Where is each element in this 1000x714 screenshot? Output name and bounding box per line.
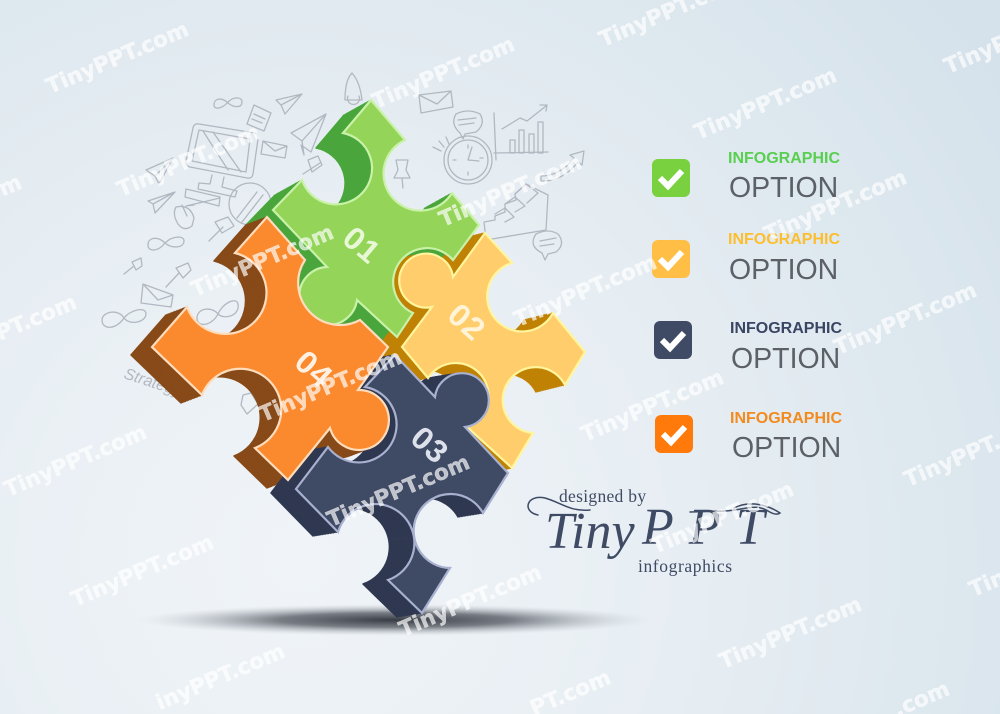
legend row 1 bbox=[652, 150, 840, 204]
text: strategy doodle: Strategy bbox=[122, 366, 185, 401]
watermarks: TinyPPT.com bbox=[369, 32, 519, 115]
icon: crossed circle bbox=[229, 183, 271, 225]
watermarks: TinyPPT.com bbox=[68, 530, 218, 613]
piece 02 top face bbox=[399, 233, 585, 468]
label: option: OPTION bbox=[729, 172, 838, 204]
watermarks: TinyPPT.com bbox=[188, 220, 338, 303]
icon: push pin left bbox=[303, 156, 322, 174]
piece 01 green side bbox=[246, 101, 478, 352]
icon: envelope top right bbox=[419, 91, 453, 113]
legend row 4 bbox=[655, 410, 842, 464]
icon: bar chart bbox=[494, 105, 548, 160]
icon: speech bubble bbox=[454, 111, 482, 139]
icon: pin mid bbox=[209, 217, 234, 241]
label: infographic yellow: INFOGRAPHIC bbox=[728, 231, 840, 248]
icon: paper plane left bbox=[146, 158, 173, 184]
label: infographic green: INFOGRAPHIC bbox=[728, 150, 840, 167]
puzzle piece 01 face bbox=[273, 100, 479, 337]
icon: note bbox=[247, 105, 271, 131]
icon: infinity over orange bbox=[197, 301, 238, 324]
watermarks: TinyPPT.com bbox=[691, 63, 841, 146]
icon: push pin bbox=[394, 160, 410, 188]
icon: mouse bbox=[174, 198, 220, 229]
icon: paper plane lower bbox=[148, 192, 175, 213]
legend bbox=[652, 150, 842, 464]
doodle icons cluster bbox=[102, 73, 584, 414]
piece 03 top face bbox=[296, 355, 508, 613]
text: PPT script: PPT bbox=[641, 499, 779, 556]
watermarks: TinyPPT.com bbox=[1, 420, 151, 503]
puzzle piece 04 face bbox=[152, 217, 389, 480]
watermarks: TinyPPT.com bbox=[831, 278, 981, 361]
icon: stairs bbox=[484, 184, 548, 240]
watermarks: inyPPT.com bbox=[152, 639, 289, 714]
watermarks: TinyPPT.com bbox=[716, 592, 866, 675]
icon: envelope bbox=[261, 141, 287, 158]
icon: speech bubble lower bbox=[533, 231, 562, 260]
icon: infinity left bbox=[148, 237, 184, 250]
text: Tiny script: Tiny bbox=[545, 503, 635, 560]
text: infographics: infographics bbox=[638, 556, 733, 576]
puzzle piece 02 face bbox=[399, 233, 585, 468]
number 02: 02 bbox=[441, 296, 493, 348]
label: option: OPTION bbox=[731, 343, 840, 375]
ground shadow bbox=[137, 604, 653, 636]
icon: curved arrow bbox=[541, 151, 584, 181]
piece 04 top face bbox=[152, 217, 389, 480]
icon: infinity lower left bbox=[102, 310, 146, 327]
watermarks: TinyPPT.com bbox=[256, 345, 406, 428]
watermarks: TinyPPT.com bbox=[114, 120, 264, 203]
icon: large paper plane bbox=[291, 114, 326, 155]
label: option: OPTION bbox=[732, 432, 841, 464]
icon: pin long bbox=[166, 263, 191, 287]
icon: small pin bbox=[124, 258, 142, 274]
icon: rocket bbox=[345, 73, 362, 104]
watermarks: TinyPPT.com bbox=[761, 165, 911, 248]
icon: orange check box bbox=[655, 415, 693, 453]
watermarks: TinyPPT.com bbox=[324, 450, 474, 533]
watermarks: TinyPPT.com bbox=[436, 150, 586, 233]
piece 01 top face bbox=[273, 100, 479, 337]
watermarks: TinyPPT.com bbox=[578, 365, 728, 448]
puzzle piece 03 face bbox=[296, 355, 508, 613]
label: option: OPTION bbox=[729, 254, 838, 286]
swash strokes bbox=[528, 497, 780, 515]
label: infographic navy: INFOGRAPHIC bbox=[730, 320, 842, 337]
icon: small paper plane bbox=[276, 94, 302, 114]
text: designed by: designed by bbox=[559, 486, 646, 506]
legend row 2 bbox=[652, 231, 840, 286]
watermarks: TinyPPT.com bbox=[511, 250, 661, 333]
piece 02 yellow side bbox=[370, 233, 583, 475]
icon: navy check box bbox=[654, 321, 692, 359]
signature logo bbox=[528, 486, 780, 576]
icon: monitor bbox=[185, 124, 258, 206]
extruded sides of the four puzzle pieces bbox=[131, 101, 583, 617]
icon: infinity loop bbox=[214, 98, 242, 108]
icon: diamond doodle bbox=[241, 393, 258, 414]
number 03: 03 bbox=[404, 419, 456, 471]
watermarks: TinyPPT.com bbox=[396, 560, 546, 643]
number 04: 04 bbox=[288, 343, 340, 395]
watermarks: TinyPPT.com bbox=[43, 17, 193, 100]
icon: green check box bbox=[652, 159, 690, 197]
icon: envelope left bbox=[141, 284, 173, 307]
number 01: 01 bbox=[336, 219, 388, 271]
icon: yellow check box bbox=[652, 240, 690, 278]
icon: clock bbox=[433, 136, 492, 184]
piece 03 navy side bbox=[271, 355, 506, 617]
piece 04 orange side bbox=[131, 218, 387, 488]
legend row 3 bbox=[654, 320, 842, 375]
watermarks: TinyPPT.com bbox=[648, 477, 798, 560]
label: infographic orange: INFOGRAPHIC bbox=[730, 410, 842, 427]
